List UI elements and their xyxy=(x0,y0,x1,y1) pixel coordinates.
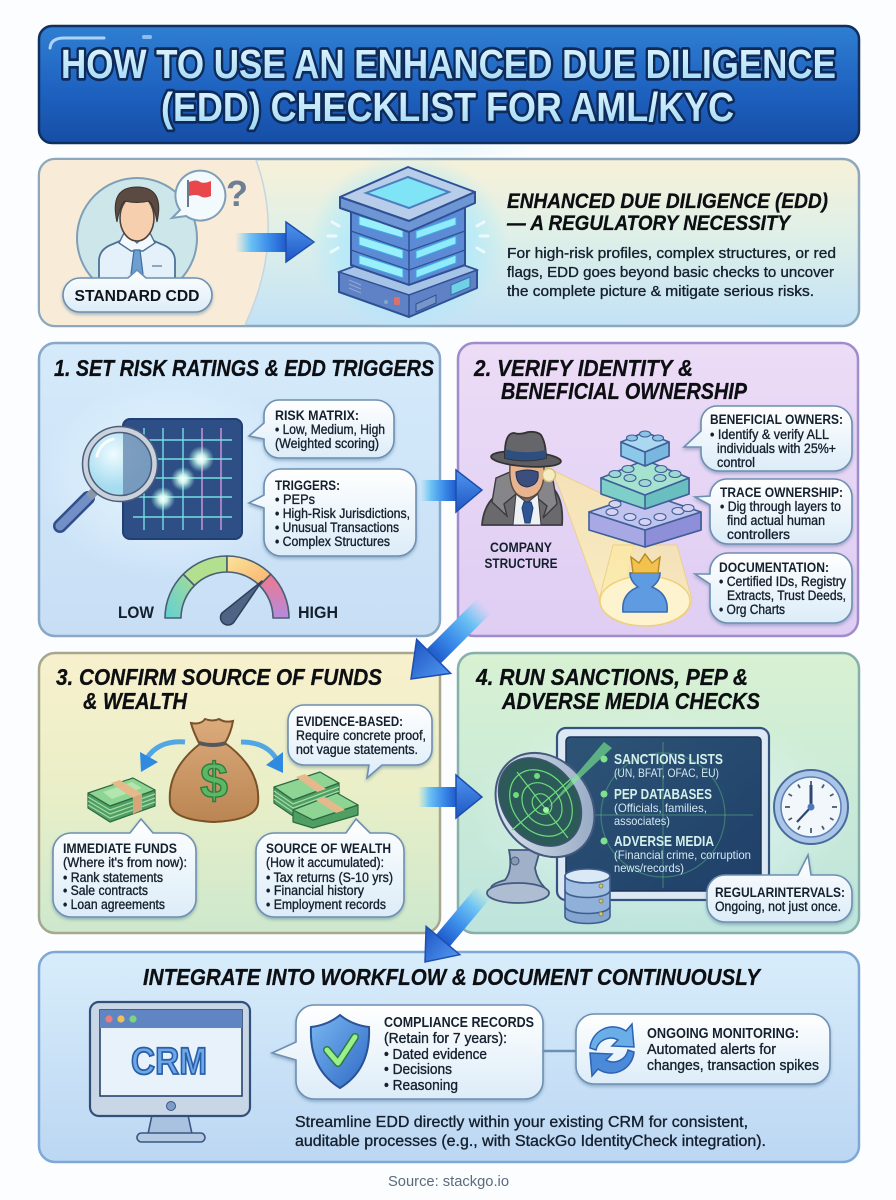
callout: documentation: Extracts, Trust Deeds, xyxy=(727,588,846,603)
heading 5: INTEGRATE INTO WORKFLOW & DOCUMENT CONTINUOUSLY xyxy=(143,964,762,990)
gauge needle xyxy=(220,581,262,625)
labels: low and high: HIGH xyxy=(298,603,338,622)
heading 2: BENEFICIAL OWNERSHIP xyxy=(501,378,748,404)
heading 4: 4. RUN SANCTIONS, PEP & xyxy=(475,664,748,690)
heading 3 xyxy=(56,664,383,714)
text: compliance list xyxy=(384,1015,534,1094)
callout: regular intervals xyxy=(707,855,852,922)
text: CRM summary: auditable processes (e.g., with StackGo IdentityCheck integration). xyxy=(295,1133,766,1150)
icon: server stack xyxy=(308,154,508,330)
callout: trace ownership: find actual human xyxy=(727,513,825,528)
callout: evidence based xyxy=(288,705,432,778)
heading 2 xyxy=(473,355,748,404)
text: CRM summary xyxy=(295,1114,766,1150)
icon: crowned owner xyxy=(623,554,667,612)
monitor: screening list: news/records) xyxy=(614,861,684,875)
callout: regular intervals: Ongoing, not just once. xyxy=(715,899,841,914)
callout: documentation: • Certified IDs, Registry xyxy=(719,574,846,589)
callout: immediate funds: • Rank statements xyxy=(63,870,163,885)
icon: money bag xyxy=(170,719,258,822)
monitor: screening list: PEP DATABASES xyxy=(614,786,712,803)
monitor: screening list: SANCTIONS LISTS xyxy=(614,751,723,768)
callout: regular intervals: REGULARINTERVALS: xyxy=(715,885,845,900)
standard CDD label xyxy=(63,270,212,312)
callout: source of wealth: SOURCE OF WEALTH xyxy=(266,841,391,856)
monitor: screening list: (UN, BFAT, OFAC, EU) xyxy=(614,766,719,780)
callout: risk matrix: (Weighted scoring) xyxy=(275,436,379,451)
panel 2: identity and ownership xyxy=(458,343,858,636)
text: EDD description xyxy=(507,245,836,300)
icon: cash stacks right xyxy=(274,772,358,828)
text: monitoring: Automated alerts for xyxy=(647,1042,776,1058)
callout: compliance records xyxy=(272,1005,543,1099)
callout: triggers: • PEPs xyxy=(275,492,315,507)
callout: trace ownership: • Dig through layers to xyxy=(720,499,841,514)
title banner xyxy=(39,26,859,143)
callout: beneficial owners: individuals with 25%+ xyxy=(717,441,836,456)
icon: ownership blocks xyxy=(589,431,701,547)
callout: beneficial owners: • Identify & verify ALL xyxy=(710,427,829,442)
heading 2: 2. VERIFY IDENTITY & xyxy=(473,355,693,381)
heading: EDD: — A REGULATORY NECESSITY xyxy=(506,212,792,235)
source credit: Source: stackgo.io xyxy=(388,1173,509,1190)
spotlight beams xyxy=(550,469,692,626)
text: monitoring: changes, transaction spikes xyxy=(647,1058,819,1074)
arrow: step 2 to step 3 xyxy=(394,588,502,696)
monitor: screening list xyxy=(557,728,769,900)
panel 3: source of funds xyxy=(39,653,440,933)
arrow: step 3 to step 4 xyxy=(418,775,482,818)
icon: refresh arrows xyxy=(590,1024,634,1076)
panel: intro xyxy=(39,154,859,330)
gauge: low to high xyxy=(165,556,289,625)
text: EDD description: For high-risk profiles, complex structures, or red xyxy=(507,245,836,262)
callout: source of wealth xyxy=(256,819,404,917)
monitor: screening list: ADVERSE MEDIA xyxy=(614,833,714,850)
question mark: ? xyxy=(226,173,248,214)
heading 4: ADVERSE MEDIA CHECKS xyxy=(501,688,761,714)
text: compliance list: • Decisions xyxy=(384,1062,452,1078)
icon: clock xyxy=(774,770,848,844)
text: CRM summary: Streamline EDD directly within your existing CRM for consistent, xyxy=(295,1114,748,1131)
callout: beneficial owners: control xyxy=(717,455,755,470)
chart: risk matrix grid xyxy=(123,419,242,539)
callout: immediate funds xyxy=(53,819,196,917)
arrow: step 4 to final panel xyxy=(408,877,501,976)
callout: source of wealth: • Financial history xyxy=(266,883,364,898)
label: company structure: STRUCTURE xyxy=(484,556,558,571)
icon: detective xyxy=(482,432,562,525)
callout: triggers: • Unusual Transactions xyxy=(275,520,399,535)
text: EDD description: flags, EDD goes beyond basic checks to uncover xyxy=(507,264,834,281)
callout: source of wealth: (How it accumulated): xyxy=(266,855,384,870)
icon: CRM monitor: CRM xyxy=(131,1041,207,1083)
text: monitoring xyxy=(647,1026,819,1074)
heading 3: & WEALTH xyxy=(83,688,187,714)
callout: risk matrix: • Low, Medium, High xyxy=(275,422,385,437)
text: compliance list: • Dated evidence xyxy=(384,1047,487,1063)
title banner: (EDD) CHECKLIST FOR AML/KYC xyxy=(161,84,734,130)
arrow: step 1 to step 2 xyxy=(420,470,482,512)
heading: EDD xyxy=(506,190,828,235)
icon: standard CDD person with flag xyxy=(77,178,197,298)
callout: triggers: • High-Risk Jurisdictions, xyxy=(275,506,410,521)
icon: shield xyxy=(311,1015,369,1088)
callout: source of wealth: • Employment records xyxy=(266,897,386,912)
callout: trace ownership xyxy=(695,479,852,544)
text: compliance list: • Reasoning xyxy=(384,1078,458,1094)
callout: evidence based: EVIDENCE-BASED: xyxy=(296,714,403,729)
monitor: screening list: (Officials, families, xyxy=(614,801,707,815)
callout: ongoing monitoring xyxy=(576,1014,830,1084)
labels: low and high: LOW xyxy=(118,603,155,622)
icon: magnifying glass xyxy=(60,430,154,526)
callout: trace ownership: controllers xyxy=(727,527,790,542)
arrow: to source of wealth xyxy=(241,742,283,773)
callout: source of wealth: • Tax returns (S-10 yrs) xyxy=(266,870,393,885)
panel 4: sanctions checks xyxy=(458,653,859,933)
text: monitoring: ONGOING MONITORING: xyxy=(647,1026,799,1042)
callout: triggers: TRIGGERS: xyxy=(275,478,340,493)
text: compliance list: COMPLIANCE RECORDS xyxy=(384,1015,534,1031)
icon: database xyxy=(565,869,610,924)
text: EDD description: the complete picture & mitigate serious risks. xyxy=(507,283,814,300)
callout: immediate funds: IMMEDIATE FUNDS xyxy=(63,841,177,856)
labels: low and high xyxy=(118,603,338,622)
callout: triggers: • Complex Structures xyxy=(275,534,390,549)
panel 1: risk ratings xyxy=(35,343,440,636)
callout: trace ownership: TRACE OWNERSHIP: xyxy=(720,485,843,500)
callout: immediate funds: • Loan agreements xyxy=(63,897,165,912)
heading 1: 1. SET RISK RATINGS & EDD TRIGGERS xyxy=(54,355,435,381)
monitor: screening list: (Financial crime, corruption xyxy=(614,848,751,862)
text: compliance list: (Retain for 7 years): xyxy=(384,1031,507,1047)
callout: immediate funds: • Sale contracts xyxy=(63,883,148,898)
arrow: CDD to EDD xyxy=(235,222,314,262)
bubble: red flag xyxy=(172,171,225,221)
callout: evidence based: not vague statements. xyxy=(296,742,418,757)
heading 4 xyxy=(475,664,761,714)
heading: EDD: ENHANCED DUE DILIGENCE (EDD) xyxy=(507,190,828,213)
callout: evidence based: Require concrete proof, xyxy=(296,728,426,743)
callout: documentation: • Org Charts xyxy=(719,602,785,617)
icon: CRM monitor xyxy=(90,1002,250,1142)
label: company structure xyxy=(484,540,558,571)
monitor: screening list: associates) xyxy=(614,814,670,828)
icon: money bag: $ xyxy=(200,753,228,809)
label: company structure: COMPANY xyxy=(490,540,552,555)
callout: immediate funds: (Where it's from now): xyxy=(63,855,187,870)
callout: triggers xyxy=(249,469,416,556)
callout: risk matrix xyxy=(249,400,394,458)
callout: documentation xyxy=(695,553,852,623)
arrow: to immediate funds xyxy=(140,742,185,772)
callout: documentation: DOCUMENTATION: xyxy=(719,560,829,575)
callout: risk matrix: RISK MATRIX: xyxy=(275,408,359,423)
panel 5: integrate into workflow xyxy=(39,952,859,1162)
heading 3: 3. CONFIRM SOURCE OF FUNDS xyxy=(56,664,383,690)
icon: cash stack left xyxy=(88,778,155,822)
icon: radar dish xyxy=(475,733,615,903)
callout: beneficial owners: BENEFICIAL OWNERS: xyxy=(710,412,843,427)
standard CDD label: STANDARD CDD xyxy=(74,288,200,305)
callout: beneficial owners xyxy=(684,406,852,471)
